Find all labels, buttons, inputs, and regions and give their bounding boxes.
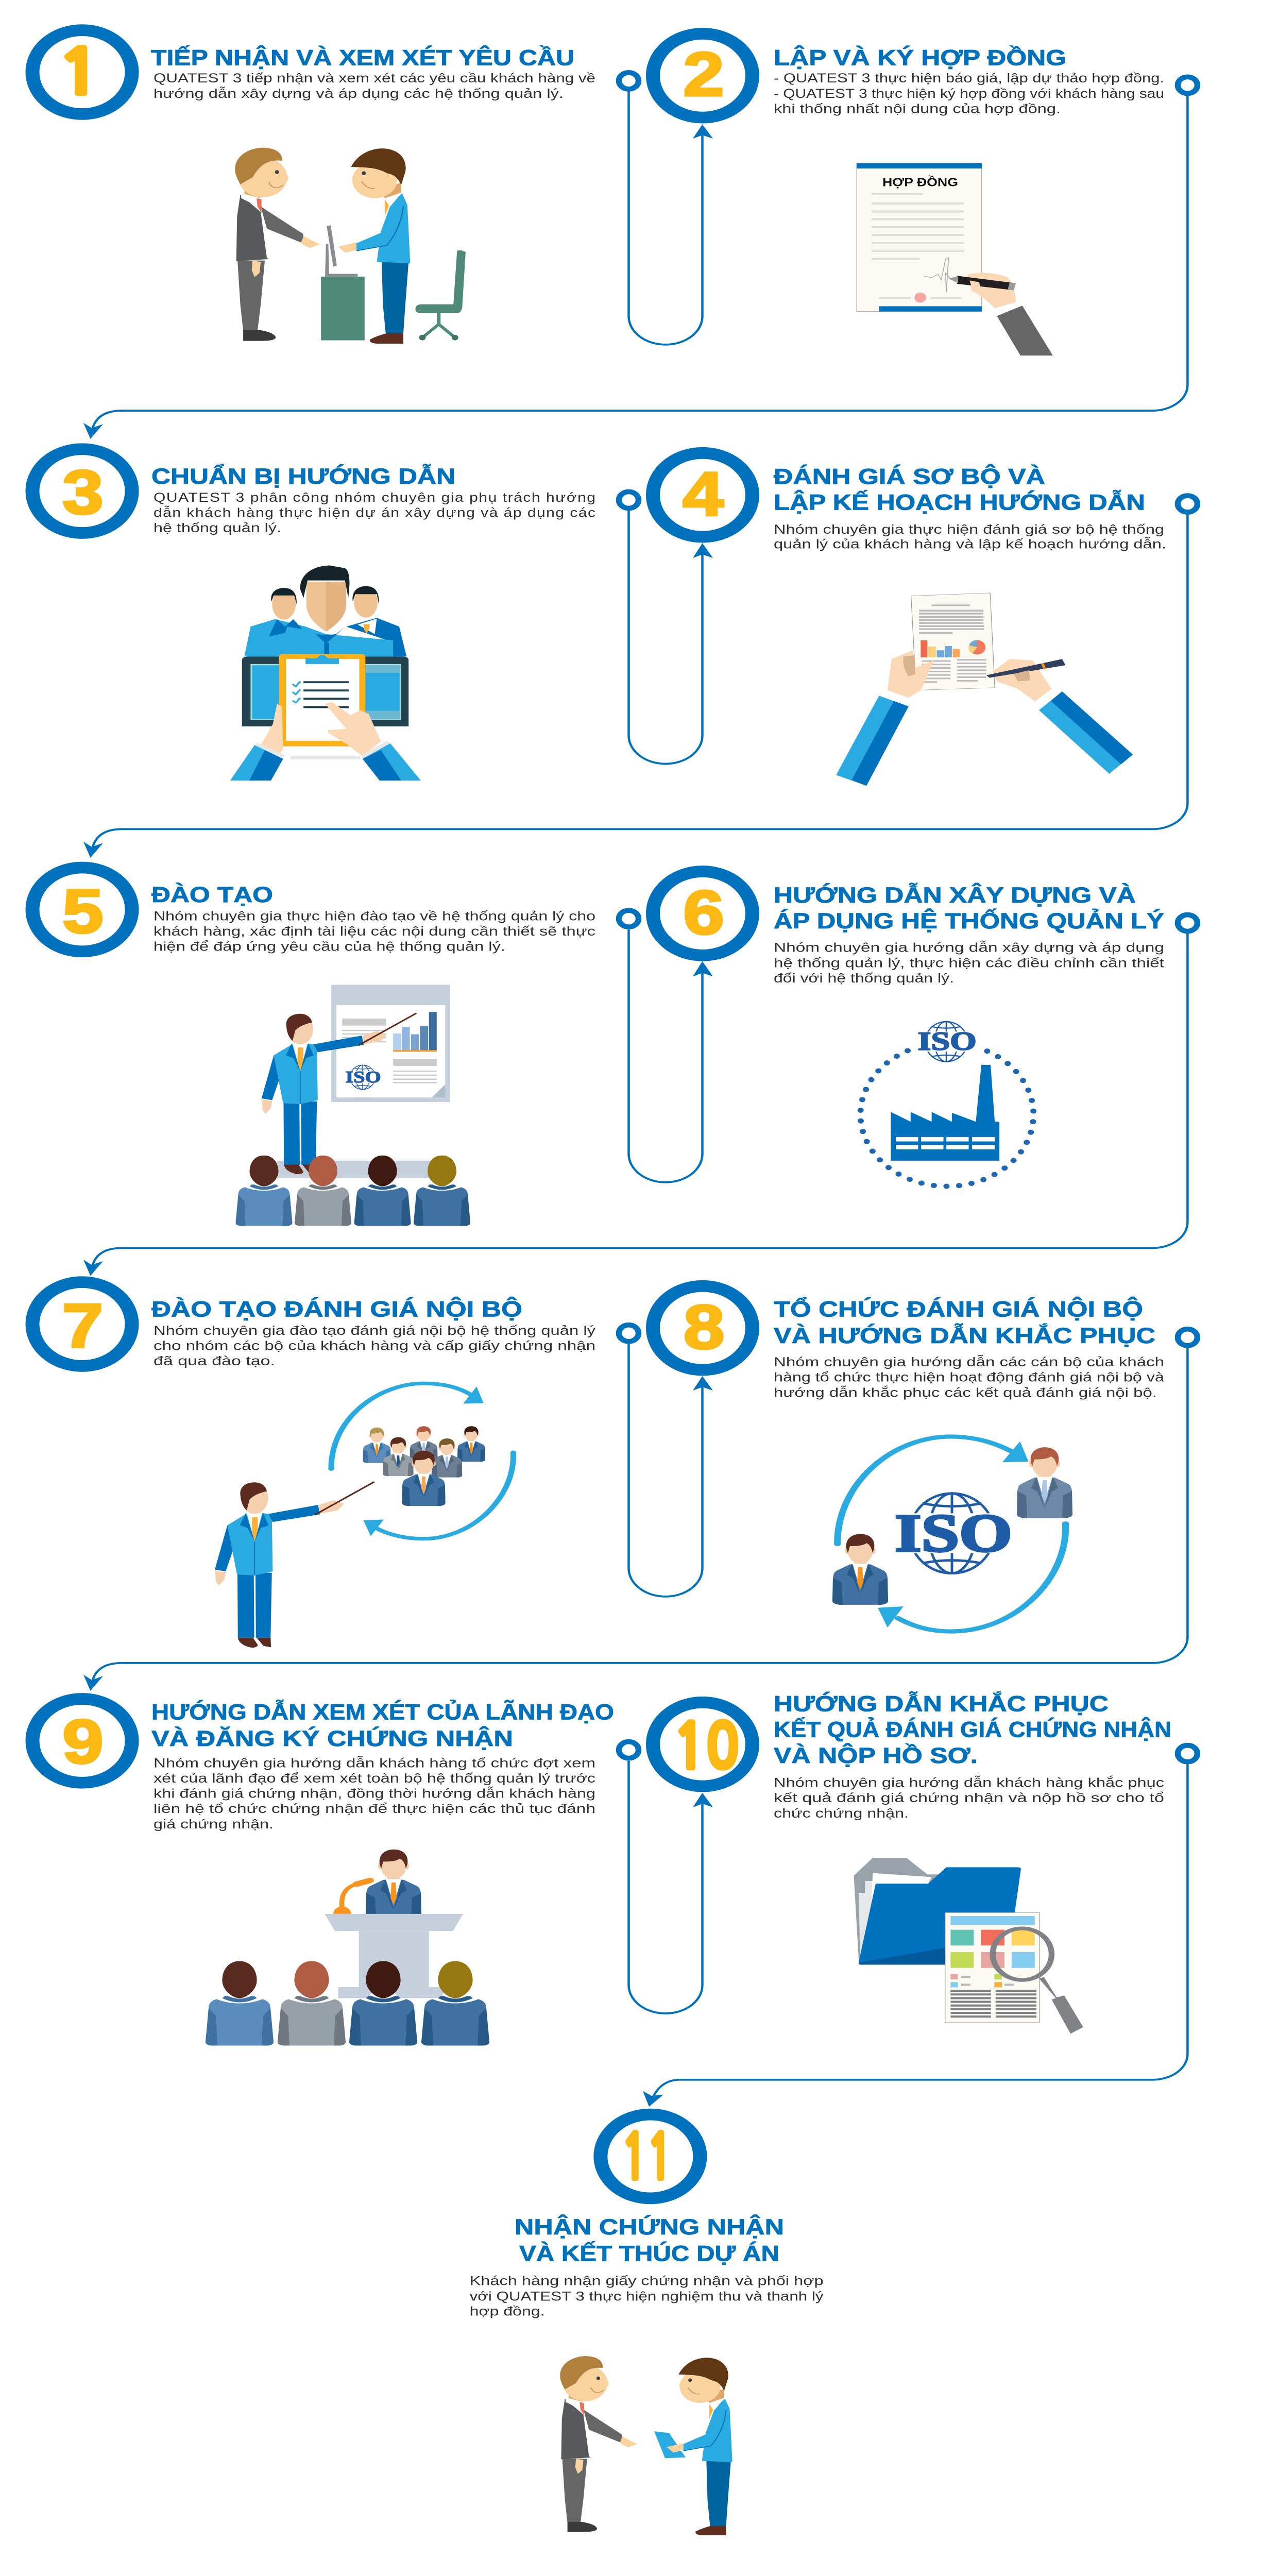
- text block: step 8: Nhóm chuyên gia hướng dẫn các cán bộ của khách: [774, 1354, 1164, 1369]
- badge: number 1: [32, 30, 132, 114]
- heading: step 8: TỔ CHỨC ĐÁNH GIÁ NỘI BỘ: [774, 1297, 1143, 1321]
- text block: step 4: quản lý của khách hàng và lập kế hoạch hướng dẫn.: [774, 537, 1166, 551]
- heading: step 10: KẾT QUẢ ĐÁNH GIÁ CHỨNG NHẬN: [774, 1717, 1171, 1741]
- text block: step 7: [154, 1323, 595, 1368]
- connector: from step 10 to step 11: [643, 1745, 1197, 2107]
- text block: step 6: hệ thống quản lý, thực hiện các điều chỉnh cần thiết: [774, 955, 1164, 970]
- illustration: hand signing a contract: HỢP ĐỒNG: [882, 175, 958, 189]
- text block: step 11: với QUATEST 3 thực hiện nghiệm thu và thanh lý: [470, 2289, 824, 2303]
- heading: step 11: VÀ KẾT THÚC DỰ ÁN: [519, 2241, 779, 2266]
- illustration: speaker at podium with audience: [206, 1850, 489, 2045]
- illustration: folder, document and magnifier: [854, 1858, 1083, 2033]
- heading: step 3: CHUẨN BỊ HƯỚNG DẪN: [151, 464, 455, 488]
- text block: step 8: [774, 1354, 1165, 1400]
- text block: step 11: Khách hàng nhận giấy chứng nhận và phối hợp: [470, 2274, 824, 2288]
- badge: number 3: 3: [62, 457, 104, 527]
- text block: step 3: dẫn khách hàng thực hiện dự án xây dựng và áp dụng các: [154, 505, 595, 520]
- text block: step 3: [154, 490, 595, 535]
- text block: step 7: cho nhóm các bộ của khách hàng và cấp giấy chứng nhận: [154, 1338, 595, 1353]
- heading: step 9: VÀ ĐĂNG KÝ CHỨNG NHẬN: [151, 1726, 513, 1751]
- text block: step 10: [774, 1775, 1164, 1820]
- text block: step 10: kết quả đánh giá chứng nhận và nộp hồ sơ cho tổ: [774, 1790, 1164, 1805]
- text block: step 9: [154, 1756, 595, 1831]
- illustration: ISO factory in dotted circle: ISO: [918, 1027, 977, 1056]
- text block: step 5: Nhóm chuyên gia thực hiện đào tạo về hệ thống quản lý cho: [154, 909, 595, 923]
- text block: step 2: khi thống nhất nội dung của hợp đồng.: [774, 101, 1061, 116]
- text block: step 3: hệ thống quản lý.: [154, 520, 281, 535]
- heading: step 4: [774, 464, 1145, 515]
- panel: step 4: [653, 453, 1166, 786]
- badge: number 10: 10: [673, 1716, 739, 1777]
- heading: step 9: HƯỚNG DẪN XEM XÉT CỦA LÃNH ĐẠO: [151, 1700, 614, 1724]
- text block: step 10: Nhóm chuyên gia hướng dẫn khách hàng khắc phục: [774, 1775, 1164, 1790]
- connector: loop from step 3 to step 4: [619, 492, 713, 764]
- badge: number 6: [653, 872, 752, 955]
- heading: step 10: HƯỚNG DẪN KHẮC PHỤC: [774, 1691, 1109, 1716]
- illustration: hands annotating a report: [836, 593, 1133, 786]
- text block: step 11: hợp đồng.: [470, 2304, 545, 2318]
- text block: step 10: chức chứng nhận.: [774, 1806, 909, 1820]
- heading: step 4: LẬP KẾ HOẠCH HƯỚNG DẪN: [774, 490, 1145, 515]
- heading: step 2: LẬP VÀ KÝ HỢP ĐỒNG: [774, 45, 1066, 70]
- illustration: trainer presenting ISO board to audience: [236, 985, 470, 1226]
- text block: step 9: khi đánh giá chứng nhận, đồng thời hướng dẫn khách hàng: [154, 1786, 595, 1801]
- text block: step 2: - QUATEST 3 thực hiện báo giá, lập dự thảo hợp đồng.: [774, 71, 1164, 86]
- badge: number 5: 5: [62, 877, 104, 946]
- badge: number 3: [32, 449, 132, 533]
- text block: step 9: giá chứng nhận.: [154, 1817, 274, 1831]
- connector: loop from step 7 to step 8: [619, 1325, 713, 1597]
- badge: number 2: 2: [683, 40, 724, 109]
- illustration: two men shaking hands at a desk: [235, 148, 466, 344]
- text block: step 6: Nhóm chuyên gia hướng dẫn xây dựng và áp dụng: [774, 940, 1164, 955]
- illustration: expert team with checklist: [230, 566, 421, 781]
- badge: number 2: [653, 33, 752, 117]
- illustration: handing over the certificate: [560, 2356, 732, 2535]
- panel: step 6: [653, 872, 1164, 1187]
- heading: step 6: [774, 883, 1164, 933]
- badge: number 9: [32, 1699, 132, 1783]
- badge: number 1: 1: [57, 42, 101, 103]
- heading: step 8: [774, 1297, 1155, 1348]
- heading: step 7: ĐÀO TẠO ĐÁNH GIÁ NỘI BỘ: [151, 1297, 522, 1321]
- connector: from step 8 to step 9: [83, 1329, 1197, 1691]
- text block: step 8: hàng tổ chức thực hiện hoạt động đánh giá nội bộ và: [774, 1370, 1165, 1384]
- illustration: hand signing a contract: [857, 163, 1053, 355]
- badge: number 10: [653, 1702, 752, 1786]
- badge: number 4: 4: [683, 460, 724, 529]
- badge: number 9: 9: [62, 1707, 104, 1776]
- connector: from step 4 to step 5: [83, 496, 1197, 858]
- badge: number 6: 6: [683, 878, 724, 947]
- text block: step 9: Nhóm chuyên gia hướng dẫn khách hàng tổ chức đợt xem: [154, 1756, 595, 1770]
- text block: step 1: QUATEST 3 tiếp nhận và xem xét các yêu cầu khách hàng về: [154, 71, 595, 86]
- text block: step 5: hiện để đáp ứng yêu cầu của hệ thống quản lý.: [154, 939, 505, 954]
- panel: step 10: [653, 1691, 1171, 2033]
- badge: number 8: [653, 1286, 752, 1370]
- connector: loop from step 5 to step 6: [619, 910, 713, 1182]
- badge: number 5: [32, 868, 132, 952]
- illustration: ISO cycle between two people: ISO: [895, 1503, 1012, 1563]
- illustration: ISO cycle between two people: [832, 1436, 1072, 1632]
- text block: step 6: [774, 940, 1164, 986]
- text block: step 9: liên hệ tổ chức chứng nhận để thực hiện các thủ tục đánh: [154, 1801, 595, 1816]
- heading: step 4: ĐÁNH GIÁ SƠ BỘ VÀ: [774, 464, 1045, 488]
- text block: step 1: [154, 71, 595, 100]
- heading: step 11: [515, 2215, 784, 2266]
- heading: step 8: VÀ HƯỚNG DẪN KHẮC PHỤC: [774, 1324, 1155, 1348]
- heading: step 1: TIẾP NHẬN VÀ XEM XÉT YÊU CẦU: [151, 45, 574, 70]
- heading: step 5: ĐÀO TẠO: [151, 883, 273, 907]
- connector: loop from step 1 to step 2: [619, 73, 713, 345]
- panel: step 2: [653, 33, 1164, 355]
- panel: step 5: [32, 868, 595, 1226]
- connector: from step 6 to step 7: [83, 914, 1197, 1276]
- heading: step 11: NHẬN CHỨNG NHẬN: [515, 2215, 784, 2239]
- badge: number 7: 7: [62, 1291, 103, 1361]
- text block: step 5: [154, 909, 595, 954]
- heading: step 6: ÁP DỤNG HỆ THỐNG QUẢN LÝ: [774, 909, 1164, 933]
- text block: step 8: hướng dẫn khắc phục các kết quả đánh giá nội bộ.: [774, 1385, 1157, 1400]
- illustration: trainer with team in a cycle: [215, 1383, 514, 1648]
- panel: step 9: [32, 1699, 614, 2045]
- text block: step 2: [774, 71, 1164, 116]
- text block: step 1: hướng dẫn xây dựng và áp dụng các hệ thống quản lý.: [154, 86, 564, 100]
- text block: step 4: Nhóm chuyên gia thực hiện đánh giá sơ bộ hệ thống: [774, 522, 1164, 536]
- badge: number 11: [601, 2114, 700, 2198]
- text block: step 9: xét của lãnh đạo để xem xét toàn bộ hệ thống quản lý trước: [154, 1771, 595, 1785]
- heading: step 10: [774, 1691, 1171, 1768]
- text block: step 2: - QUATEST 3 thực hiện ký hợp đồng với khách hàng sau: [774, 86, 1164, 100]
- badge: number 11: 11: [621, 2127, 672, 2188]
- badge: number 4: [653, 453, 752, 537]
- text block: step 7: Nhóm chuyên gia đào tạo đánh giá nội bộ hệ thống quản lý: [154, 1323, 595, 1338]
- text block: step 6: đối với hệ thống quản lý.: [774, 971, 954, 986]
- panel: step 3: [32, 449, 595, 781]
- text block: step 5: khách hàng, xác định tài liệu các nội dung cần thiết sẽ thực: [154, 924, 595, 938]
- text block: step 11: [470, 2274, 824, 2318]
- text block: step 3: QUATEST 3 phân công nhóm chuyên gia phụ trách hướng: [154, 490, 595, 505]
- heading: step 6: HƯỚNG DẪN XÂY DỰNG VÀ: [774, 883, 1136, 907]
- panel: step 8: [653, 1286, 1165, 1632]
- panel: step 11: [470, 2114, 824, 2535]
- panel: step 7: [32, 1282, 595, 1648]
- connector: from step 2 to step 3: [83, 77, 1197, 439]
- panel: step 1: [32, 30, 595, 344]
- text block: step 7: đã qua đào tạo.: [154, 1353, 275, 1368]
- illustration: trainer presenting ISO board to audience: ISO: [346, 1068, 381, 1086]
- badge: number 8: 8: [684, 1293, 724, 1362]
- badge: number 7: [32, 1282, 132, 1366]
- illustration: ISO factory in dotted circle: [860, 1022, 1033, 1187]
- connector: loop from step 9 to step 10: [619, 1742, 713, 2013]
- text block: step 4: [774, 522, 1166, 551]
- heading: step 9: [151, 1700, 614, 1751]
- heading: step 10: VÀ NỘP HỒ SƠ.: [774, 1743, 978, 1768]
